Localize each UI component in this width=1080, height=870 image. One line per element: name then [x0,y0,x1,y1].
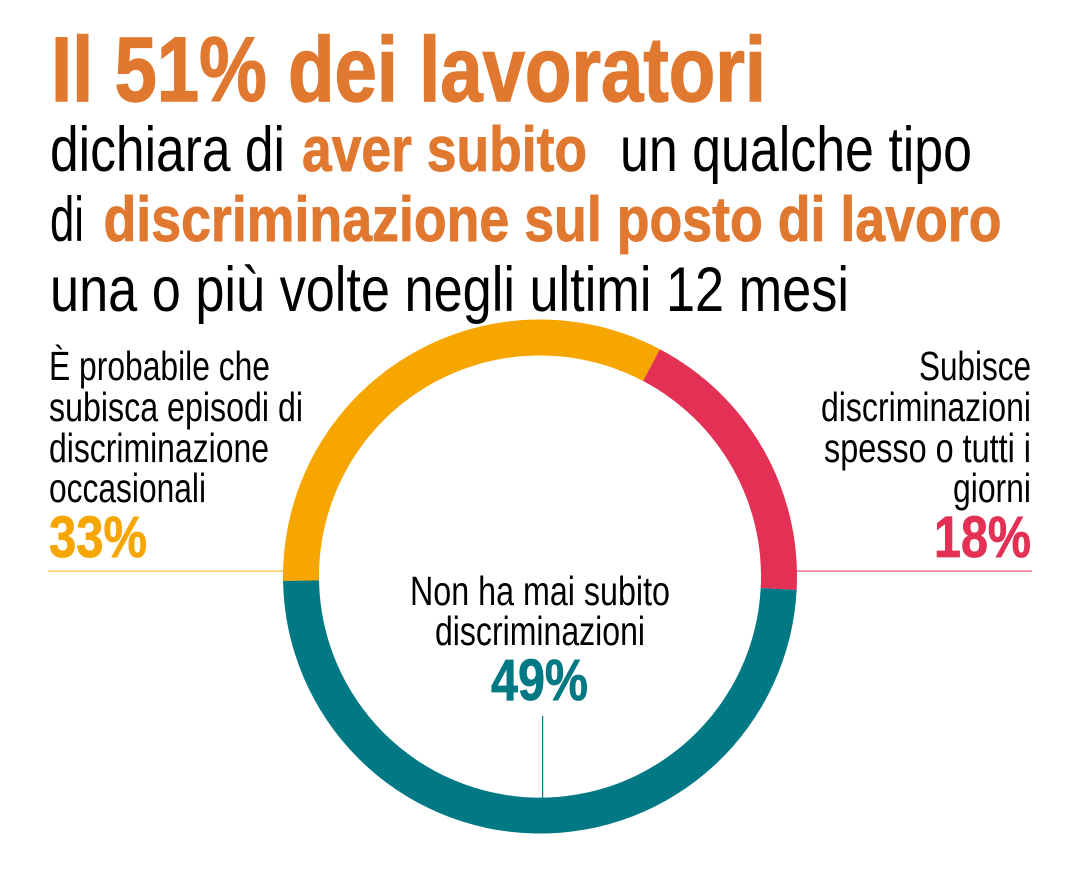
right callout: 18%: Subisce [919,343,1031,389]
segment: 18% frequent [643,349,797,590]
left callout: 33%: occasionali [49,465,206,511]
center callout: 49%: 49% [491,648,588,713]
left callout: 33%: discriminazione [49,425,269,471]
subtitle block: una o più volte negli ultimi 12 mesi [50,255,849,325]
left callout: 33%: subisca episodi di [49,384,303,430]
donut chart [283,320,797,834]
subtitle block: dichiara di [50,115,285,185]
left callout: 33% [48,343,303,572]
segment: 49% never [283,580,797,834]
subtitle block: di [50,185,84,255]
subtitle block [50,115,1002,325]
right callout: 18%: 18% [934,505,1031,570]
center callout: 49% [410,568,670,800]
center callout: 49%: Non ha mai subito [410,568,670,614]
right callout: 18%: giorni [953,465,1031,511]
subtitle block: un qualche tipo [620,115,972,185]
subtitle block: aver subito [302,115,587,185]
right callout: 18% [797,343,1032,572]
left callout: 33%: È probabile che [49,343,270,389]
segment: 33% occasional [283,320,660,581]
center callout: 49%: discriminazioni [435,608,645,654]
title: Il 51% dei lavoratori [51,19,766,121]
right callout: 18%: spesso o tutti i [824,425,1031,471]
left callout: 33%: 33% [49,505,147,570]
